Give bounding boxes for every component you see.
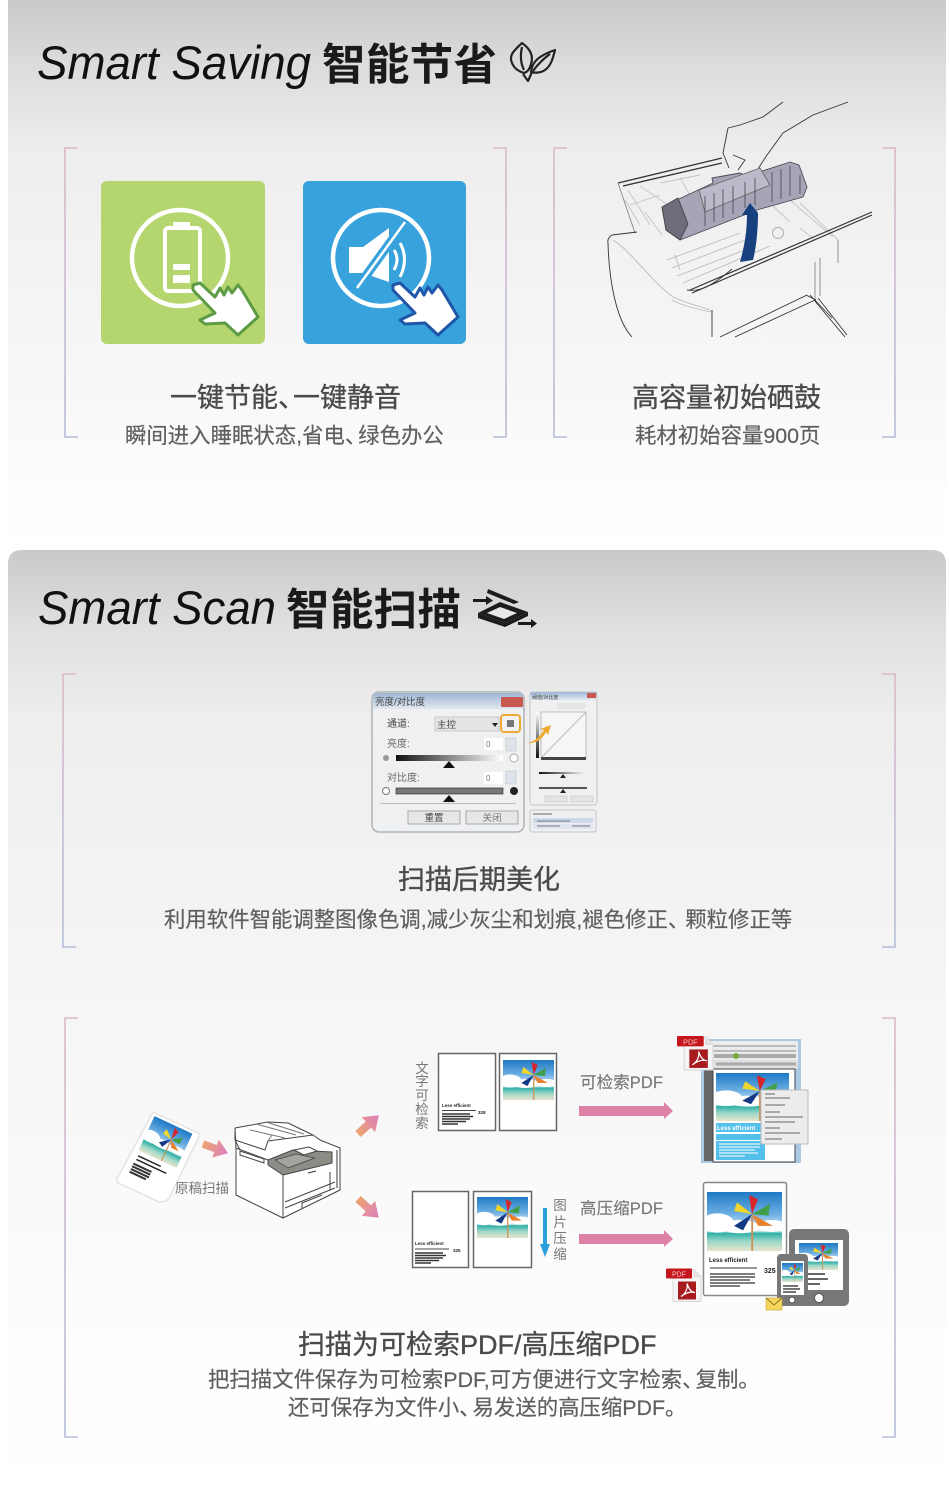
text: image compression: 压: [553, 1231, 567, 1246]
document: image layer: [499, 1054, 557, 1130]
text: text searchable: 检: [415, 1102, 429, 1117]
text: image compression: 片: [553, 1215, 567, 1230]
text: text searchable: 字: [415, 1074, 429, 1089]
dialog: brightness contrast: 通道:: [387, 717, 410, 730]
illustration: original document: [115, 1110, 200, 1206]
text: high compression pdf: 高压缩PDF: [580, 1199, 663, 1218]
text: original scan: 原稿扫描: [175, 1181, 229, 1196]
icon: scanner: [473, 589, 537, 628]
illustration: toner cartridge replacement: [608, 102, 872, 337]
text: image compression: [553, 1198, 567, 1262]
dialog: brightness contrast: 亮度/对比度: [375, 696, 426, 708]
document: compressed image: [473, 1192, 532, 1268]
dialog: brightness contrast: 关闭: [482, 812, 502, 824]
illustration: compressed pdf and devices: [666, 1182, 849, 1310]
bracket: pdf: [65, 1018, 895, 1437]
illustration: multifunction printer: [235, 1122, 340, 1218]
text: post-processing: 利用软件智能调整图像色调,减少灰尘和划痕,褪色修正、颗粒修正等: [164, 908, 792, 932]
dialog: brightness contrast: 0: [486, 740, 491, 749]
dialog: brightness contrast: 亮度:: [387, 737, 410, 750]
text: searchable and compressed pdf: 还可保存为文件小、易发送的高压缩PDF。: [288, 1396, 686, 1420]
illustration: pdf reader window: [677, 1036, 808, 1163]
arrow: searchable pdf: [579, 1102, 673, 1119]
dialog: brightness contrast: [372, 692, 524, 832]
bracket: energy saving: [65, 148, 506, 437]
dialog: brightness contrast: 主控: [437, 719, 457, 731]
title: smart saving: 智能节省: [322, 42, 497, 90]
text: text searchable: 可: [415, 1088, 429, 1103]
illustration: compressed pdf and devices: Less efficient: [709, 1258, 747, 1264]
arrow: high compression pdf: [579, 1230, 673, 1247]
text: text searchable: [415, 1061, 429, 1131]
text: high-capacity toner: 高容量初始硒鼓: [632, 383, 821, 413]
illustration: compressed pdf and devices: 325: [764, 1268, 776, 1275]
text: image compression: 图: [553, 1198, 567, 1213]
arrow: to searchable pdf: [351, 1108, 385, 1141]
bracket: post-processing: [63, 674, 895, 947]
dialog: curves: [527, 692, 597, 805]
panel: smart scan: [8, 550, 946, 1489]
text: image compression: 缩: [553, 1247, 567, 1262]
text: searchable and compressed pdf: 扫描为可检索PDF/高压缩PDF: [298, 1330, 657, 1360]
panel: smart saving: [8, 0, 946, 548]
icon: mute button: [303, 181, 466, 344]
title: smart saving: [37, 36, 497, 90]
text: one-key saving: 瞬间进入睡眠状态,省电、绿色办公: [125, 424, 444, 448]
text: post-processing: [164, 865, 792, 932]
dialog: curves: 阈值/对比度: [532, 694, 558, 701]
text: high-capacity toner: [632, 383, 821, 448]
icon: pdf: [666, 1268, 701, 1302]
text: one-key saving: 一键节能、一键静音: [170, 383, 401, 413]
arrow: into printer: [200, 1135, 231, 1162]
document: text layer: 328: [478, 1110, 486, 1115]
dialog: brightness contrast: 对比度:: [387, 771, 420, 784]
arrow: compress down: [540, 1208, 550, 1257]
document: text layer: [438, 1054, 496, 1130]
document: compressed text: [412, 1192, 468, 1268]
illustration: pdf reader window: Less efficient: [717, 1126, 755, 1132]
document: text layer: Less efficient: [442, 1103, 471, 1108]
text: searchable pdf: 可检索PDF: [580, 1073, 663, 1092]
title: smart scan: [38, 581, 461, 635]
text: post-processing: 扫描后期美化: [398, 865, 560, 895]
dialog: brightness contrast: 重置: [424, 812, 444, 824]
document: compressed text: Less efficient: [415, 1241, 444, 1246]
icon: envelope: [766, 1298, 782, 1310]
text: high-capacity toner: 耗材初始容量900页: [635, 424, 820, 448]
text: text searchable: 文: [415, 1061, 429, 1076]
text: searchable and compressed pdf: [208, 1330, 760, 1420]
title: smart scan: 智能扫描: [286, 587, 461, 635]
device: phone: [777, 1254, 808, 1306]
dialog: options: [530, 810, 596, 832]
illustration: adjustment dialogs: [372, 692, 597, 832]
device: tablet: [789, 1229, 849, 1306]
arrow: to compressed pdf: [351, 1192, 385, 1225]
text: one-key saving: [125, 383, 444, 448]
title: smart scan: Smart Scan: [38, 581, 276, 634]
icon: leaves: [511, 43, 555, 81]
document: compressed text: 325: [453, 1248, 461, 1253]
icon: energy-saving button: [101, 181, 265, 344]
dialog: brightness contrast: 0: [486, 774, 491, 783]
text: searchable and compressed pdf: 把扫描文件保存为可检索PDF,可方便进行文字检索、复制。: [208, 1368, 760, 1392]
bracket: toner: [554, 148, 895, 437]
text: text searchable: 索: [415, 1116, 429, 1131]
title: smart saving: Smart Saving: [37, 36, 311, 89]
